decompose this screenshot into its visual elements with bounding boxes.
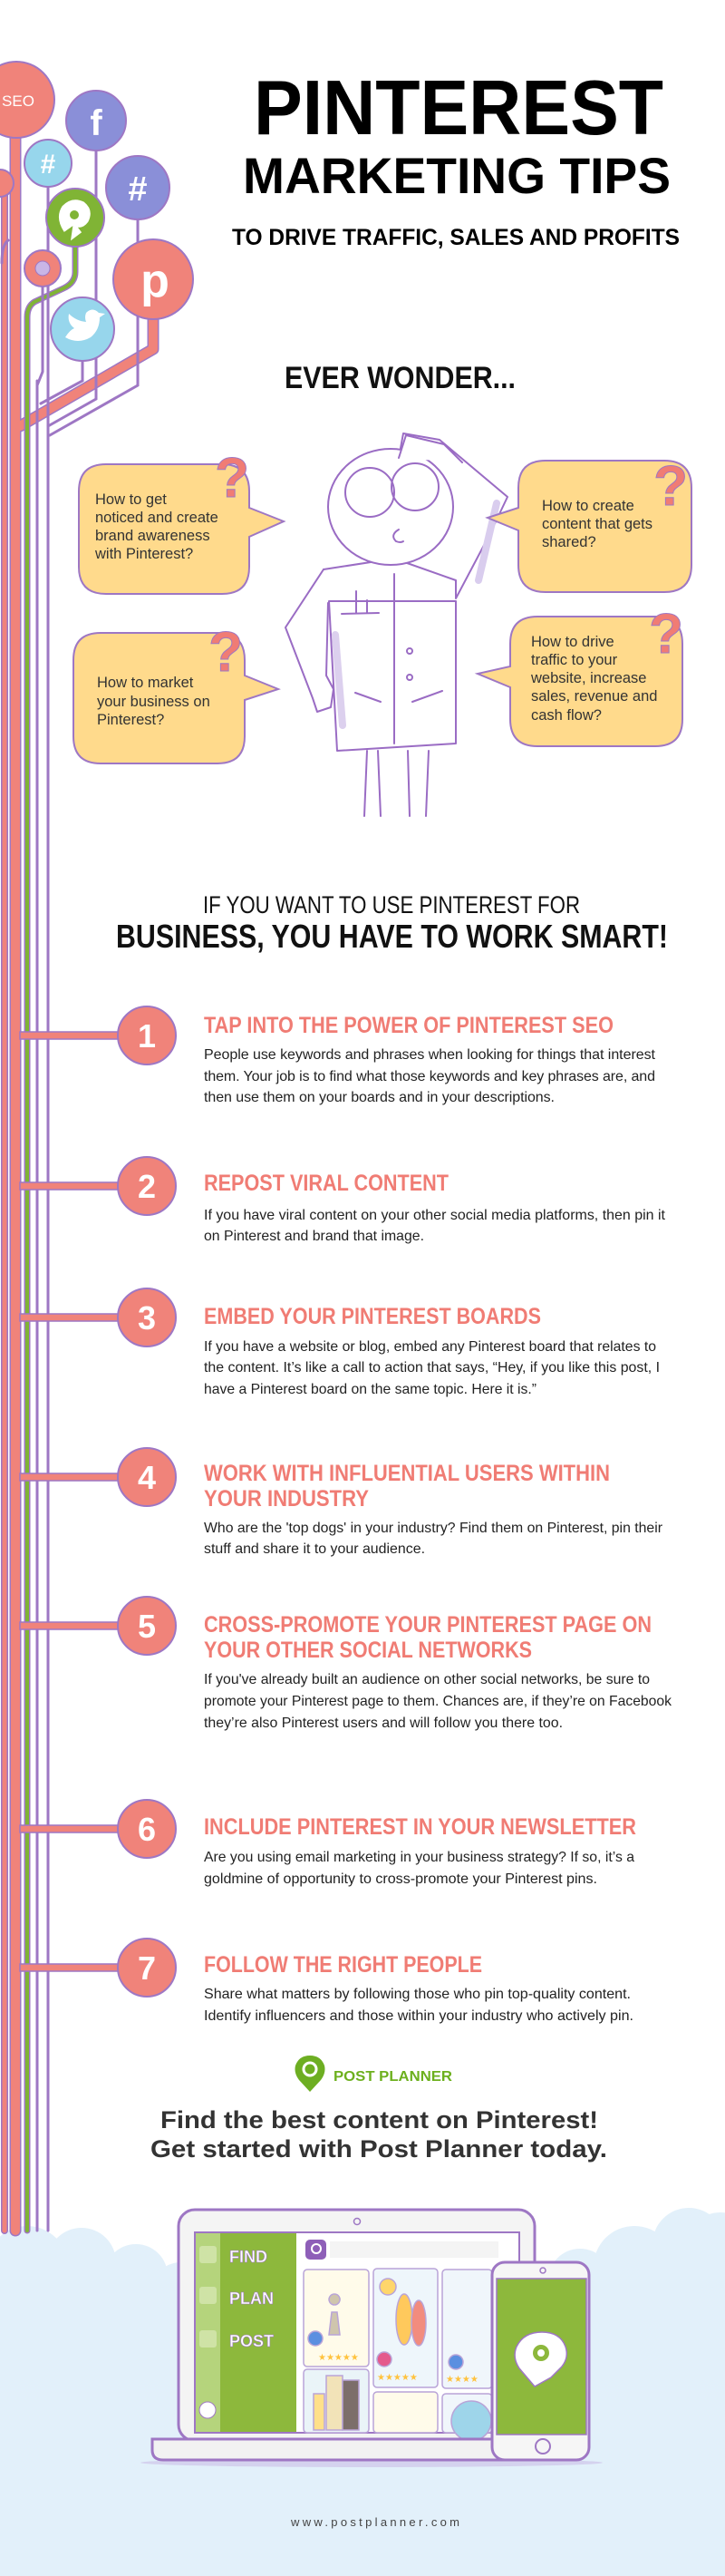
icon: hashtag purple: # <box>128 170 148 209</box>
bubble: drive traffic: cash flow? <box>531 707 602 724</box>
bubble: market business: your business on <box>97 694 210 710</box>
logo: post planner: POST PLANNER <box>334 2069 452 2085</box>
tip 3: 3 <box>138 1299 156 1337</box>
icon: SEO circle <box>0 62 54 138</box>
logo: post planner <box>295 2056 452 2092</box>
tip 2 <box>20 1157 666 1244</box>
tip 2: on Pinterest and brand that image. <box>204 1229 424 1244</box>
tree of social lines <box>2 127 153 2231</box>
icon: globe <box>24 250 61 287</box>
bubble: drive traffic: website, increase <box>530 670 646 686</box>
tip 3: have a Pinterest board on the same topic. Here it is.” <box>204 1382 536 1397</box>
icon: hashtag small blue <box>24 140 72 187</box>
bubble: market business: Pinterest? <box>97 712 164 728</box>
sidebar menu: FIND <box>229 2248 267 2266</box>
heading: work smart: IF YOU WANT TO USE PINTEREST FOR <box>203 891 580 919</box>
illustration: laptop: ★★★★★ <box>377 2373 418 2383</box>
bubble: brand awareness: How to get <box>95 491 167 508</box>
tip 5 <box>20 1597 672 1731</box>
call to action: Get started with Post Planner today. <box>150 2135 607 2163</box>
bubble: drive traffic: How to drive <box>531 634 614 650</box>
tip 5: promote your Pinterest page to them. Chances are, if they’re on Facebook <box>204 1694 672 1709</box>
tip 6: 6 <box>138 1811 156 1848</box>
footer url: www.postplanner.com <box>290 2515 459 2529</box>
title: MARKETING TIPS <box>243 147 671 204</box>
bubble: content shared: shared? <box>542 534 596 550</box>
laptop base <box>152 2439 508 2460</box>
tip 4: stuff and share it to your audience. <box>204 1541 425 1557</box>
content cards <box>304 2269 492 2441</box>
bubble: drive traffic <box>478 603 683 746</box>
bubble: content shared: How to create <box>542 498 634 514</box>
tip 5: CROSS-PROMOTE YOUR PINTEREST PAGE ON <box>204 1612 652 1638</box>
tip 7: Identify influencers and those within your industry who actively pin. <box>204 2008 633 2024</box>
connector and number 1 <box>20 1006 176 1064</box>
tip 6: Are you using email marketing in your business strategy? If so, it’s a <box>204 1850 634 1865</box>
tip 7: Share what matters by following those who pin top-quality content. <box>204 1987 631 2002</box>
tip 5: YOUR OTHER SOCIAL NETWORKS <box>204 1638 532 1663</box>
tip 4 <box>20 1448 663 1557</box>
title: PINTEREST <box>254 65 663 151</box>
illustration: laptop <box>140 2210 603 2467</box>
tip 7: 7 <box>138 1949 156 1987</box>
background: cloud footer <box>0 2208 725 2576</box>
bubble: brand awareness <box>79 447 284 594</box>
call to action: Find the best content on Pinterest! <box>160 2106 598 2134</box>
search bar <box>305 2240 498 2260</box>
illustration: laptop: ★★★★★ <box>318 2353 359 2363</box>
tip 6: INCLUDE PINTEREST IN YOUR NEWSLETTER <box>204 1814 636 1840</box>
tip 1: then use them on your boards and in your descriptions. <box>204 1090 555 1105</box>
tip 4: WORK WITH INFLUENTIAL USERS WITHIN <box>204 1461 610 1486</box>
tip 7 <box>20 1939 633 2024</box>
bubble: drive traffic: sales, revenue and <box>531 688 657 705</box>
tip 4: Who are the 'top dogs' in your industry? Find them on Pinterest, pin their <box>204 1521 663 1536</box>
tip 2: If you have viral content on your other social media platforms, then pin it <box>204 1208 666 1223</box>
call to action <box>150 2106 607 2163</box>
tip 5: 5 <box>138 1608 156 1645</box>
tip 1: People use keywords and phrases when looking for things that interest <box>204 1047 656 1063</box>
tip 7: FOLLOW THE RIGHT PEOPLE <box>204 1952 482 1978</box>
heading: work smart <box>116 891 668 955</box>
tip 6 <box>20 1800 636 1887</box>
illustration: laptop: ★★★★ <box>446 2375 478 2385</box>
sidebar menu: PLAN <box>229 2289 274 2308</box>
tip 5: they’re also Pinterest users and will follow you there too. <box>204 1716 563 1731</box>
tip 4: YOUR INDUSTRY <box>204 1486 369 1512</box>
icon: twitter <box>51 297 114 361</box>
bubble: brand awareness: brand awareness <box>95 528 210 544</box>
tip 3 <box>20 1288 660 1397</box>
bubble: market business: How to market <box>97 675 194 691</box>
icon: post planner green <box>46 189 104 247</box>
sidebar menu: POST <box>229 2332 274 2350</box>
icon: hashtag small blue: # <box>41 150 56 180</box>
icon: question mark: ? <box>649 603 683 666</box>
subtitle: TO DRIVE TRAFFIC, SALES AND PROFITS <box>232 225 680 250</box>
icon: pinterest <box>113 239 193 319</box>
tip 5: If you've already built an audience on other social networks, be sure to <box>204 1672 650 1687</box>
bubble: brand awareness: with Pinterest? <box>94 546 193 562</box>
tip 6: goldmine of opportunity to cross-promote your Pinterest pins. <box>204 1871 597 1887</box>
bubble: content shared <box>488 455 691 592</box>
bubble: market business <box>73 621 278 763</box>
icon: question mark: ? <box>653 455 688 518</box>
icon: small salmon partial circle <box>0 170 14 197</box>
icon: facebook circle <box>66 91 126 151</box>
bubble: content shared: content that gets <box>542 516 652 532</box>
bubble: drive traffic: traffic to your <box>531 652 618 668</box>
connector and number 1: 1 <box>138 1017 156 1055</box>
icon: facebook circle: f <box>90 103 102 143</box>
tip 2: 2 <box>138 1168 156 1205</box>
icon: question mark: ? <box>208 621 243 684</box>
tip 2: REPOST VIRAL CONTENT <box>204 1171 449 1196</box>
icon: SEO circle: SEO <box>2 92 34 110</box>
tip 3: If you have a website or blog, embed any Pinterest board that relates to <box>204 1339 656 1355</box>
icon: question mark: ? <box>215 447 249 510</box>
heading: ever wonder: EVER WONDER... <box>285 361 516 395</box>
illustration: phone <box>492 2262 589 2460</box>
illustration: puzzled man <box>285 433 508 816</box>
icon: pinterest: p <box>140 255 169 307</box>
sidebar menu <box>196 2233 296 2432</box>
tip 3: EMBED YOUR PINTEREST BOARDS <box>204 1304 541 1329</box>
tip 3: the content. It’s like a call to action that says, “Hey, if you like this post, I <box>204 1360 660 1375</box>
tip 4: 4 <box>138 1459 156 1496</box>
tip 1: them. Your job is to find what those keywords and key phrases are, and <box>204 1069 655 1084</box>
title <box>243 65 671 204</box>
icon: hashtag purple <box>106 156 169 219</box>
bubble: brand awareness: noticed and create <box>95 510 218 526</box>
tip 1 <box>20 1006 656 1105</box>
tip 1: TAP INTO THE POWER OF PINTEREST SEO <box>204 1013 614 1038</box>
